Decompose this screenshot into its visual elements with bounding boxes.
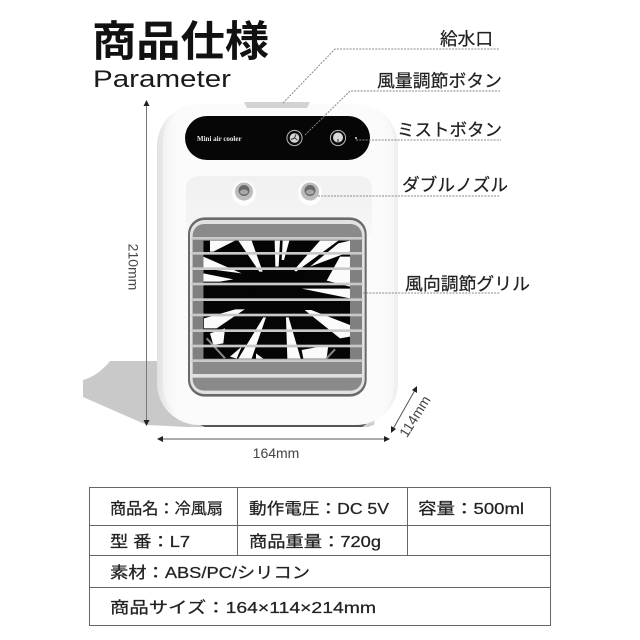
- control panel: Mini air cooler: [197, 135, 242, 143]
- floor shadow: [83, 361, 375, 427]
- row 3: 素材：ABS/PC/シリコン: [110, 564, 310, 582]
- callout: mist button: ミストボタン: [397, 120, 502, 140]
- dimension: width: 164mm: [253, 445, 299, 461]
- callout: louvre grille: 風向調節グリル: [405, 274, 530, 294]
- fan button: [287, 130, 302, 146]
- louvres: [191, 237, 363, 378]
- dimension: height: 210mm: [126, 244, 142, 290]
- body: [157, 104, 398, 425]
- row 2: 型 番：L7: [110, 533, 190, 551]
- fan: [203, 241, 350, 359]
- control panel: [185, 116, 370, 160]
- product: mini air cooler: [83, 102, 398, 427]
- callout: water inlet: 給水口: [440, 29, 493, 49]
- row 1: 容量：500ml: [418, 500, 524, 518]
- callout: double nozzle: ダブルノズル: [402, 175, 508, 195]
- side columns of grille: [193, 238, 203, 360]
- nozzle panel: [186, 176, 372, 235]
- spec table: [90, 488, 550, 626]
- water inlet lid: [244, 102, 310, 108]
- dimension: height: [126, 100, 150, 426]
- title: 商品仕様: [92, 18, 269, 65]
- row 1: [110, 500, 524, 518]
- subtitle: Parameter: [93, 66, 231, 93]
- row 1: 動作電圧：DC 5V: [249, 500, 389, 518]
- grille: [188, 217, 367, 397]
- callout: fan speed button: [305, 71, 502, 135]
- dimension: width: [157, 436, 390, 461]
- row 1: 商品名：冷風扇: [110, 500, 223, 518]
- mist button: [330, 130, 346, 146]
- callout: fan speed button: 風量調節ボタン: [377, 71, 502, 91]
- row 2: [110, 533, 381, 551]
- row 4: 商品サイズ：164×114×214mm: [110, 599, 376, 617]
- callout: water inlet: [283, 29, 499, 103]
- title: [92, 18, 269, 93]
- dimension: depth: 114mm: [396, 393, 434, 440]
- row 2: 商品重量：720g: [249, 533, 381, 551]
- nozzles: [232, 180, 322, 206]
